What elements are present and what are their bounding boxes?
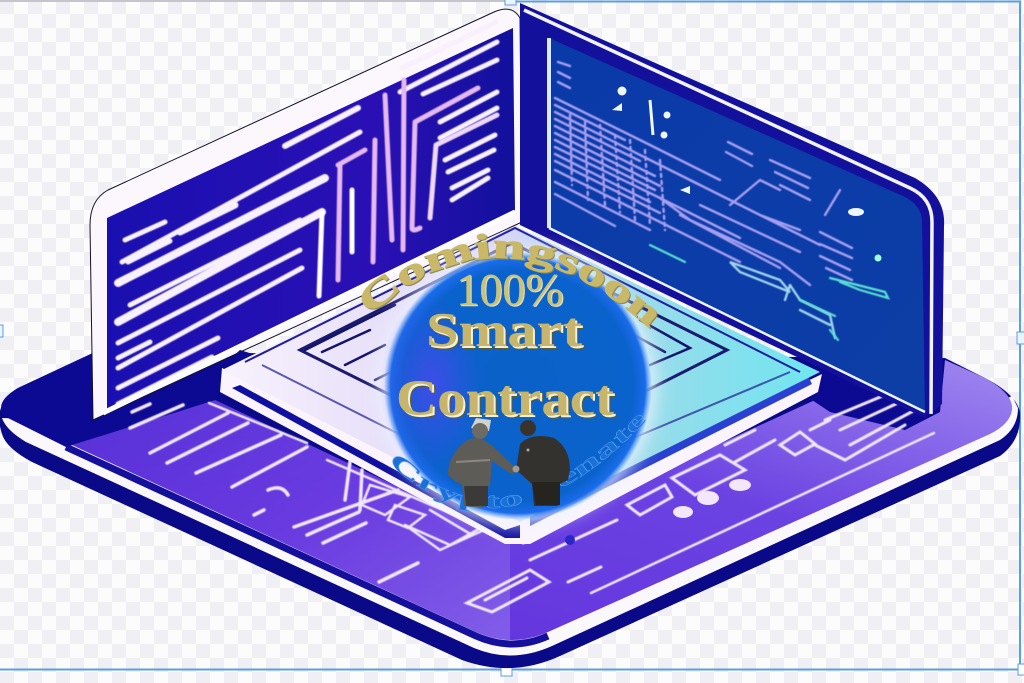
panel: central slab <box>218 226 822 544</box>
right wall: teal accents <box>650 245 888 340</box>
disc: white glow <box>380 248 656 524</box>
left wall: white frame <box>90 9 522 420</box>
figure: clasped hands <box>512 466 520 472</box>
disc: blue fill <box>384 252 652 520</box>
base: right circuit lines <box>467 395 934 612</box>
slab: top surface <box>222 226 820 522</box>
left wall: text lines <box>118 22 497 404</box>
base: white rim <box>2 396 1018 656</box>
left wall: inner screen <box>107 28 515 412</box>
left wall: lower edge <box>103 212 515 413</box>
right wall: code grid <box>555 62 852 338</box>
base: navy shaded top left <box>1 350 240 447</box>
right wall: white border line <box>524 10 932 414</box>
left wall: vertical pink lines <box>319 80 497 296</box>
slab: navy shadow left <box>218 350 320 430</box>
base: left circuit lines <box>130 403 496 582</box>
base: navy shaded wedge right <box>812 368 935 430</box>
slab: left and right rim <box>220 368 822 544</box>
right wall: dots <box>612 86 882 262</box>
heading: 100%: 100% <box>456 264 564 315</box>
badge: blue disc <box>380 248 656 524</box>
base platform <box>0 350 1020 668</box>
base: navy body <box>0 352 1020 668</box>
base: purple top surface <box>72 360 1012 640</box>
heading: Smart: Smart <box>426 302 583 357</box>
figure: left officer <box>448 418 516 508</box>
figure: right officer <box>516 420 570 506</box>
curved caption: Crypto Senate: Crypto Senate <box>392 415 646 512</box>
slab: inner text lines <box>305 305 690 380</box>
figures: two officers shaking hands <box>448 418 570 508</box>
right wall: screen <box>549 38 925 412</box>
panel: left wall <box>90 9 522 420</box>
curved heading: Comingsoon: Comingsoon <box>362 234 658 330</box>
disc: violet highlight <box>380 297 484 473</box>
slab: inner frame <box>300 243 727 457</box>
base: navy band along left edge <box>66 447 548 644</box>
panel: right wall <box>520 3 944 418</box>
base: round dots <box>565 479 751 545</box>
right wall: navy frame <box>520 3 944 418</box>
heading: Contract: Contract <box>396 371 614 427</box>
